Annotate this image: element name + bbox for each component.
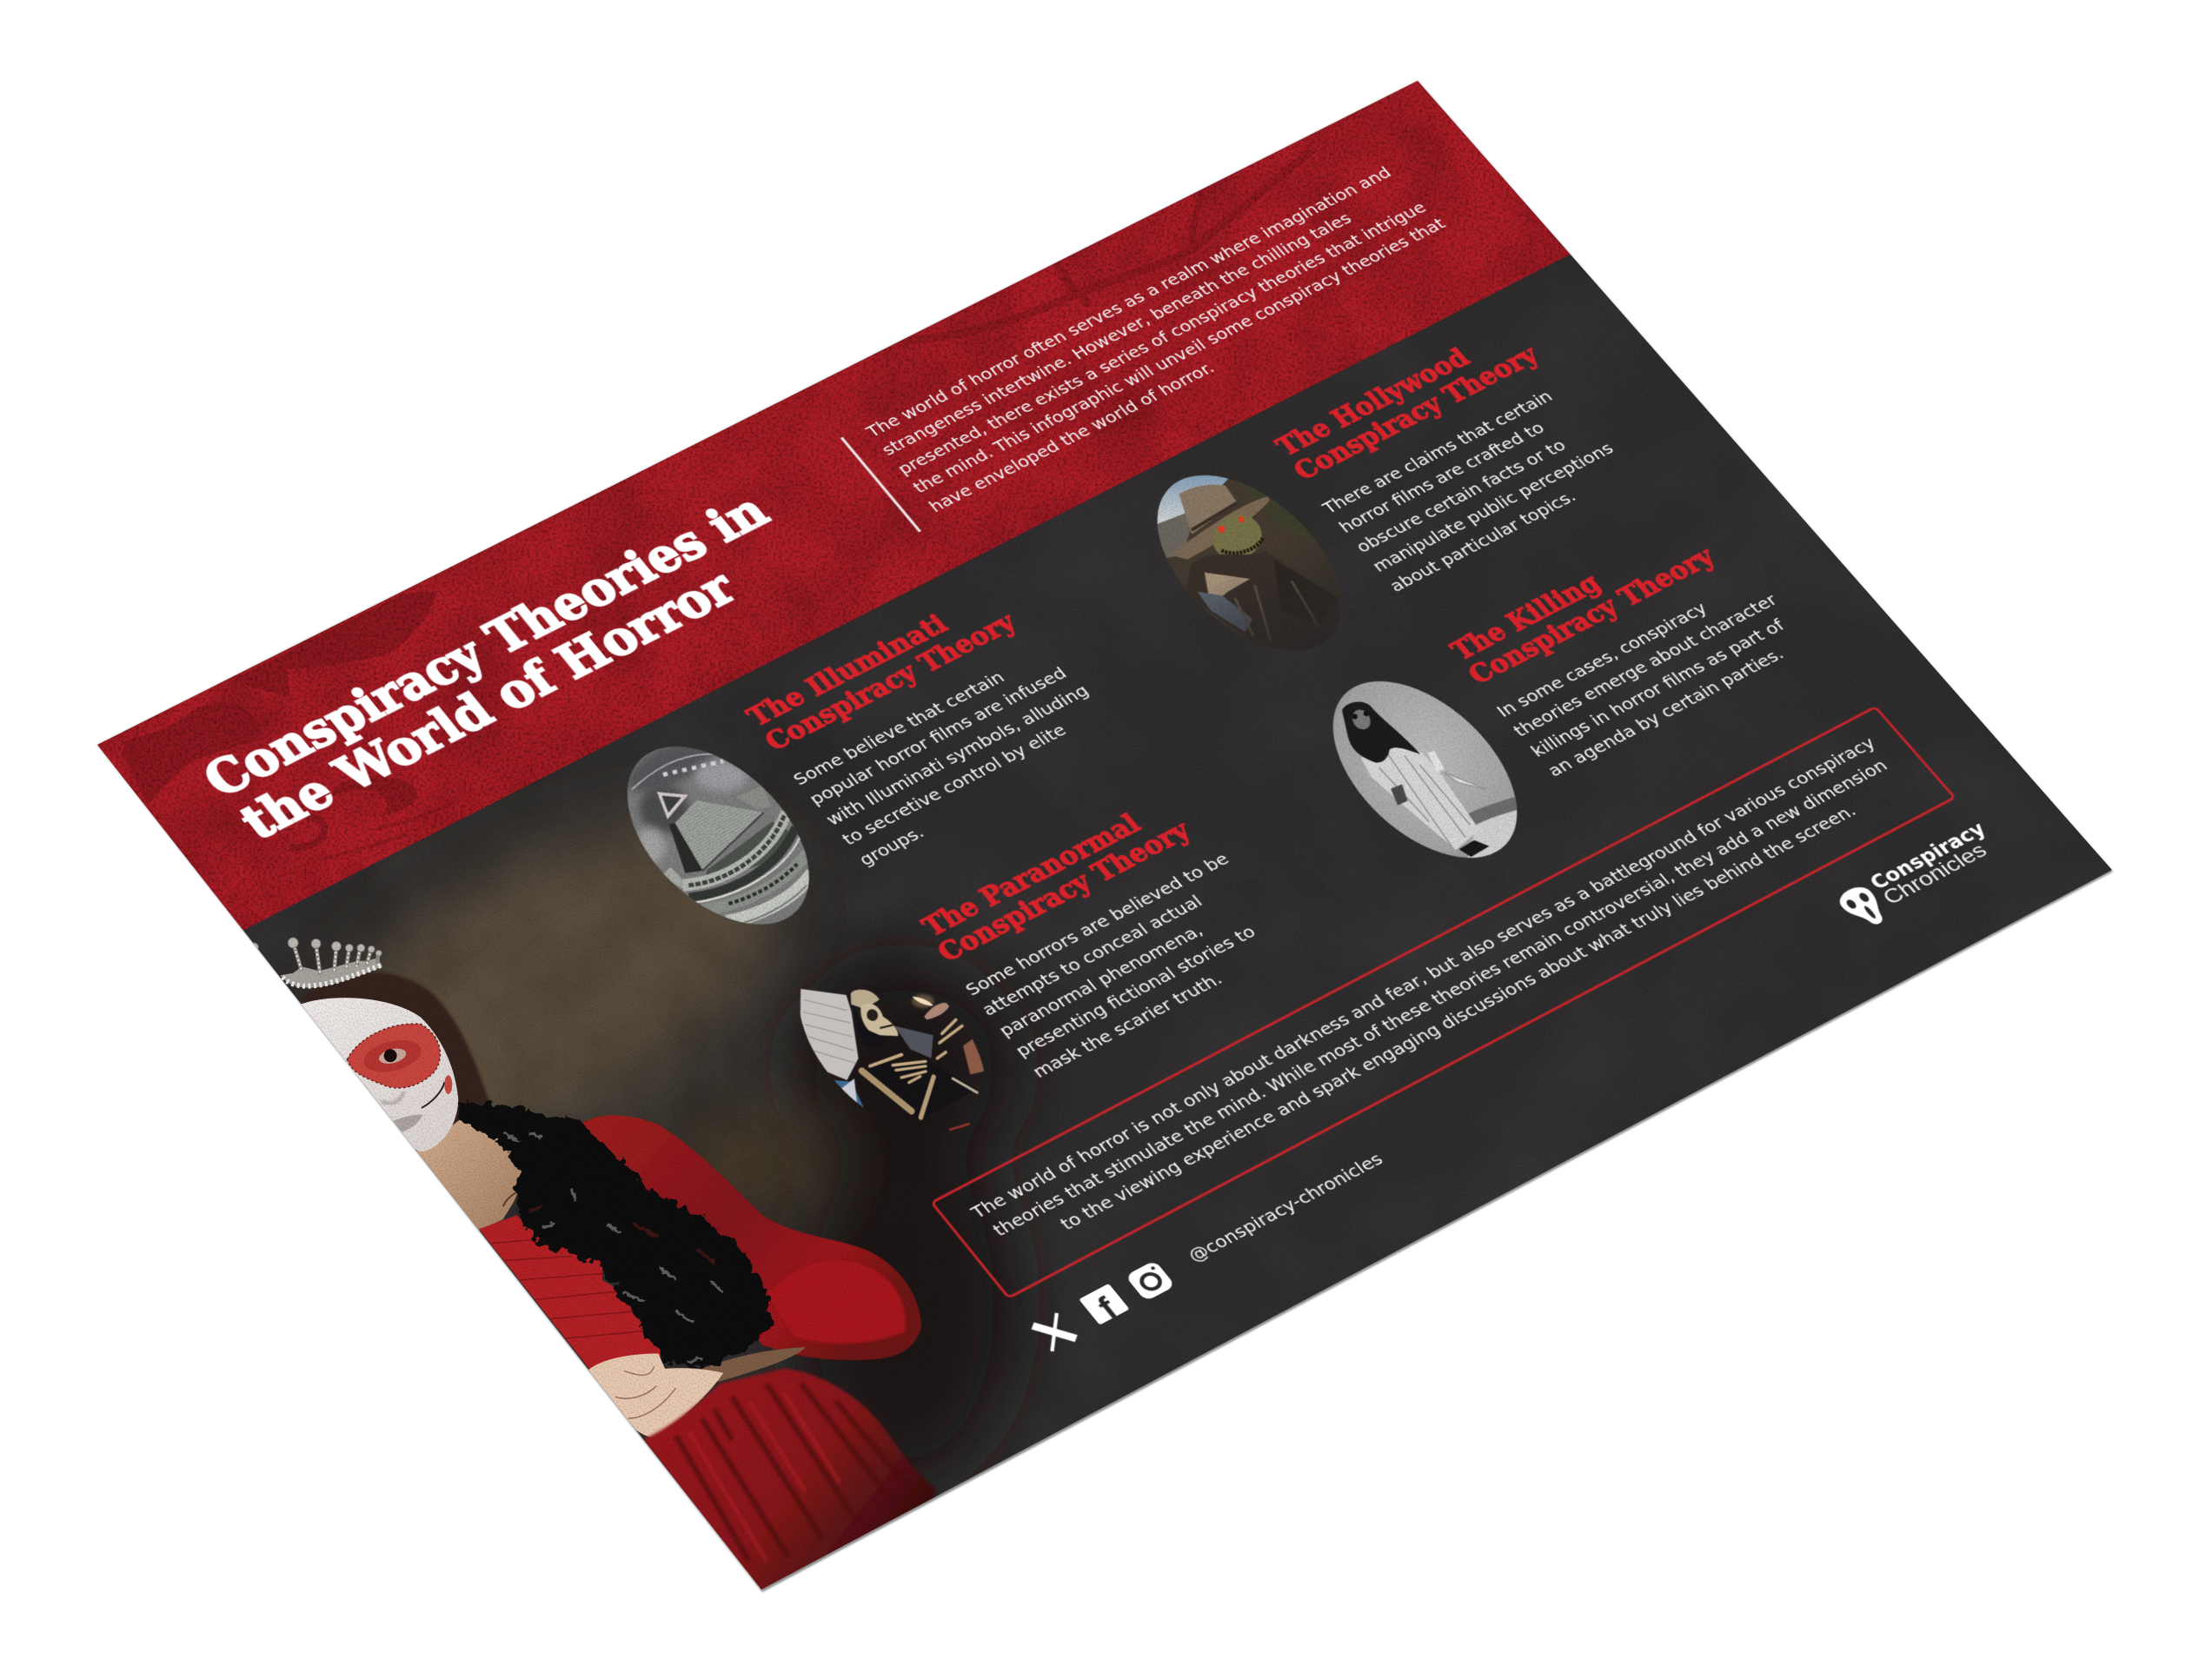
intro paragraph: The world of horror often serves as a realm where imagination and	[875, 168, 1436, 448]
woman: forearm	[693, 1347, 806, 1382]
body text: killings in horror films as part of	[1526, 619, 1799, 760]
body text	[1492, 570, 1817, 780]
heading: Conspiracy Theory	[1306, 348, 1575, 492]
body text: presenting fictional stories to	[997, 914, 1248, 1045]
body text: groups.	[850, 820, 924, 864]
body text: attempts to conceal actual	[966, 885, 1197, 1006]
logo	[1831, 818, 2008, 932]
logo wordmark: Conspiracy	[1854, 815, 1982, 888]
woman: face paint	[297, 998, 458, 1151]
body text	[789, 641, 1126, 870]
body text	[961, 849, 1301, 1082]
icon: X social	[1032, 1313, 1077, 1351]
woman: sleeve	[581, 1115, 921, 1360]
heading: The Hollywood	[1291, 351, 1504, 468]
heading: The Killing	[1453, 574, 1619, 668]
heading: The Illuminati	[743, 614, 960, 733]
panel: Paranormal theory	[711, 787, 1319, 1209]
heading: The Paranormal	[909, 806, 1142, 933]
woman: red eye mask	[347, 1024, 440, 1088]
icon: Instagram	[1125, 1260, 1176, 1302]
woman: stitched mouth details	[422, 1082, 444, 1108]
body text	[1318, 381, 1635, 596]
band motif: tree branches	[905, 154, 1308, 341]
title: the World of Horror	[229, 565, 753, 846]
callout: conclusion	[932, 707, 1955, 1297]
icon: scarecrow photo	[971, 336, 1554, 797]
intro paragraph: strangeness intertwine. However, beneath the chilling tales	[891, 215, 1392, 466]
social handle: @conspiracy-chronicles	[1155, 1126, 1359, 1234]
callout text: to the viewing experience and spark engaging discussions about what truly lies behind the screen.	[1032, 799, 1854, 1205]
intro paragraph: have enveloped the world of horror.	[936, 365, 1241, 522]
woman: tiara	[249, 938, 382, 995]
icon: scream mask	[1834, 883, 1892, 932]
body text: theories emerge about character	[1511, 594, 1795, 741]
callout frame	[932, 707, 1955, 1297]
panel: Illuminati theory	[415, 511, 1190, 1085]
woman: neck and chest skin	[416, 1120, 524, 1231]
body text: manipulate public perceptions	[1381, 446, 1642, 581]
body text: an agenda by certain parties.	[1542, 647, 1796, 780]
body text: In some cases, conspiracy	[1496, 603, 1723, 722]
photo background glow	[317, 803, 850, 1230]
band motif: swirling blotches	[122, 591, 458, 860]
heading: Conspiracy Theory	[1468, 548, 1737, 692]
body text: with Illuminati symbols, alluding	[819, 683, 1095, 826]
intro paragraph: presented, there exists a series of conspiracy theories that intrigue	[906, 203, 1469, 485]
callout text: The world of horror is not only about darkness and fear, but also serves as a battleground for various conspiracy	[945, 733, 1879, 1195]
body text: mask the scarier truth.	[1013, 959, 1212, 1064]
woman: hair behind head	[300, 972, 490, 1133]
body text: horror films are crafted to	[1350, 425, 1573, 542]
body text: Some horrors are believed to be	[950, 845, 1226, 987]
icon: ghost girl with knife photo	[1197, 592, 1656, 959]
woman in skull make-up and red dress	[249, 938, 935, 1596]
panel: Killing theory	[1197, 481, 1871, 959]
heading: Conspiracy Theory	[760, 612, 1029, 756]
body text: obscure certain facts or to	[1365, 442, 1593, 561]
woman: skirt	[643, 1369, 935, 1596]
title: Conspiracy Theories in	[192, 490, 787, 805]
callout text: theories that stimulate the mind. While most of these theories remain controversial, they add a new dimension	[966, 755, 1890, 1211]
woman: clasped hands	[588, 1354, 723, 1438]
icon: Facebook: f	[1062, 1257, 1094, 1289]
body text: popular horror films are infused	[803, 667, 1074, 806]
icon: Facebook	[1079, 1284, 1134, 1331]
dark zone around the paranormal photo and dress	[791, 965, 1017, 1486]
heading: Conspiracy Theory	[923, 813, 1192, 958]
body text: about particular topics.	[1397, 493, 1599, 601]
body text: to secretive control by elite	[834, 721, 1071, 845]
icon: dollar bill pyramid photo	[415, 597, 1019, 1085]
woman: lace cuff	[767, 1260, 906, 1344]
intro divider line	[841, 437, 920, 532]
woman: pleated bodice	[479, 1215, 676, 1369]
woman: long black curly hair	[460, 1103, 770, 1367]
logo wordmark: Chronicles	[1865, 835, 1981, 902]
body text: paranormal phenomena,	[981, 912, 1196, 1025]
header red band	[97, 81, 1570, 930]
body text: There are claims that certain	[1333, 394, 1584, 524]
intro paragraph: the mind. This infographic will unveil some conspiracy theories that	[921, 220, 1488, 503]
icon: skeleton with fan and candle photo	[717, 922, 1072, 1209]
panel: Hollywood theory	[971, 262, 1702, 797]
body text: Some believe that certain	[787, 670, 1012, 787]
